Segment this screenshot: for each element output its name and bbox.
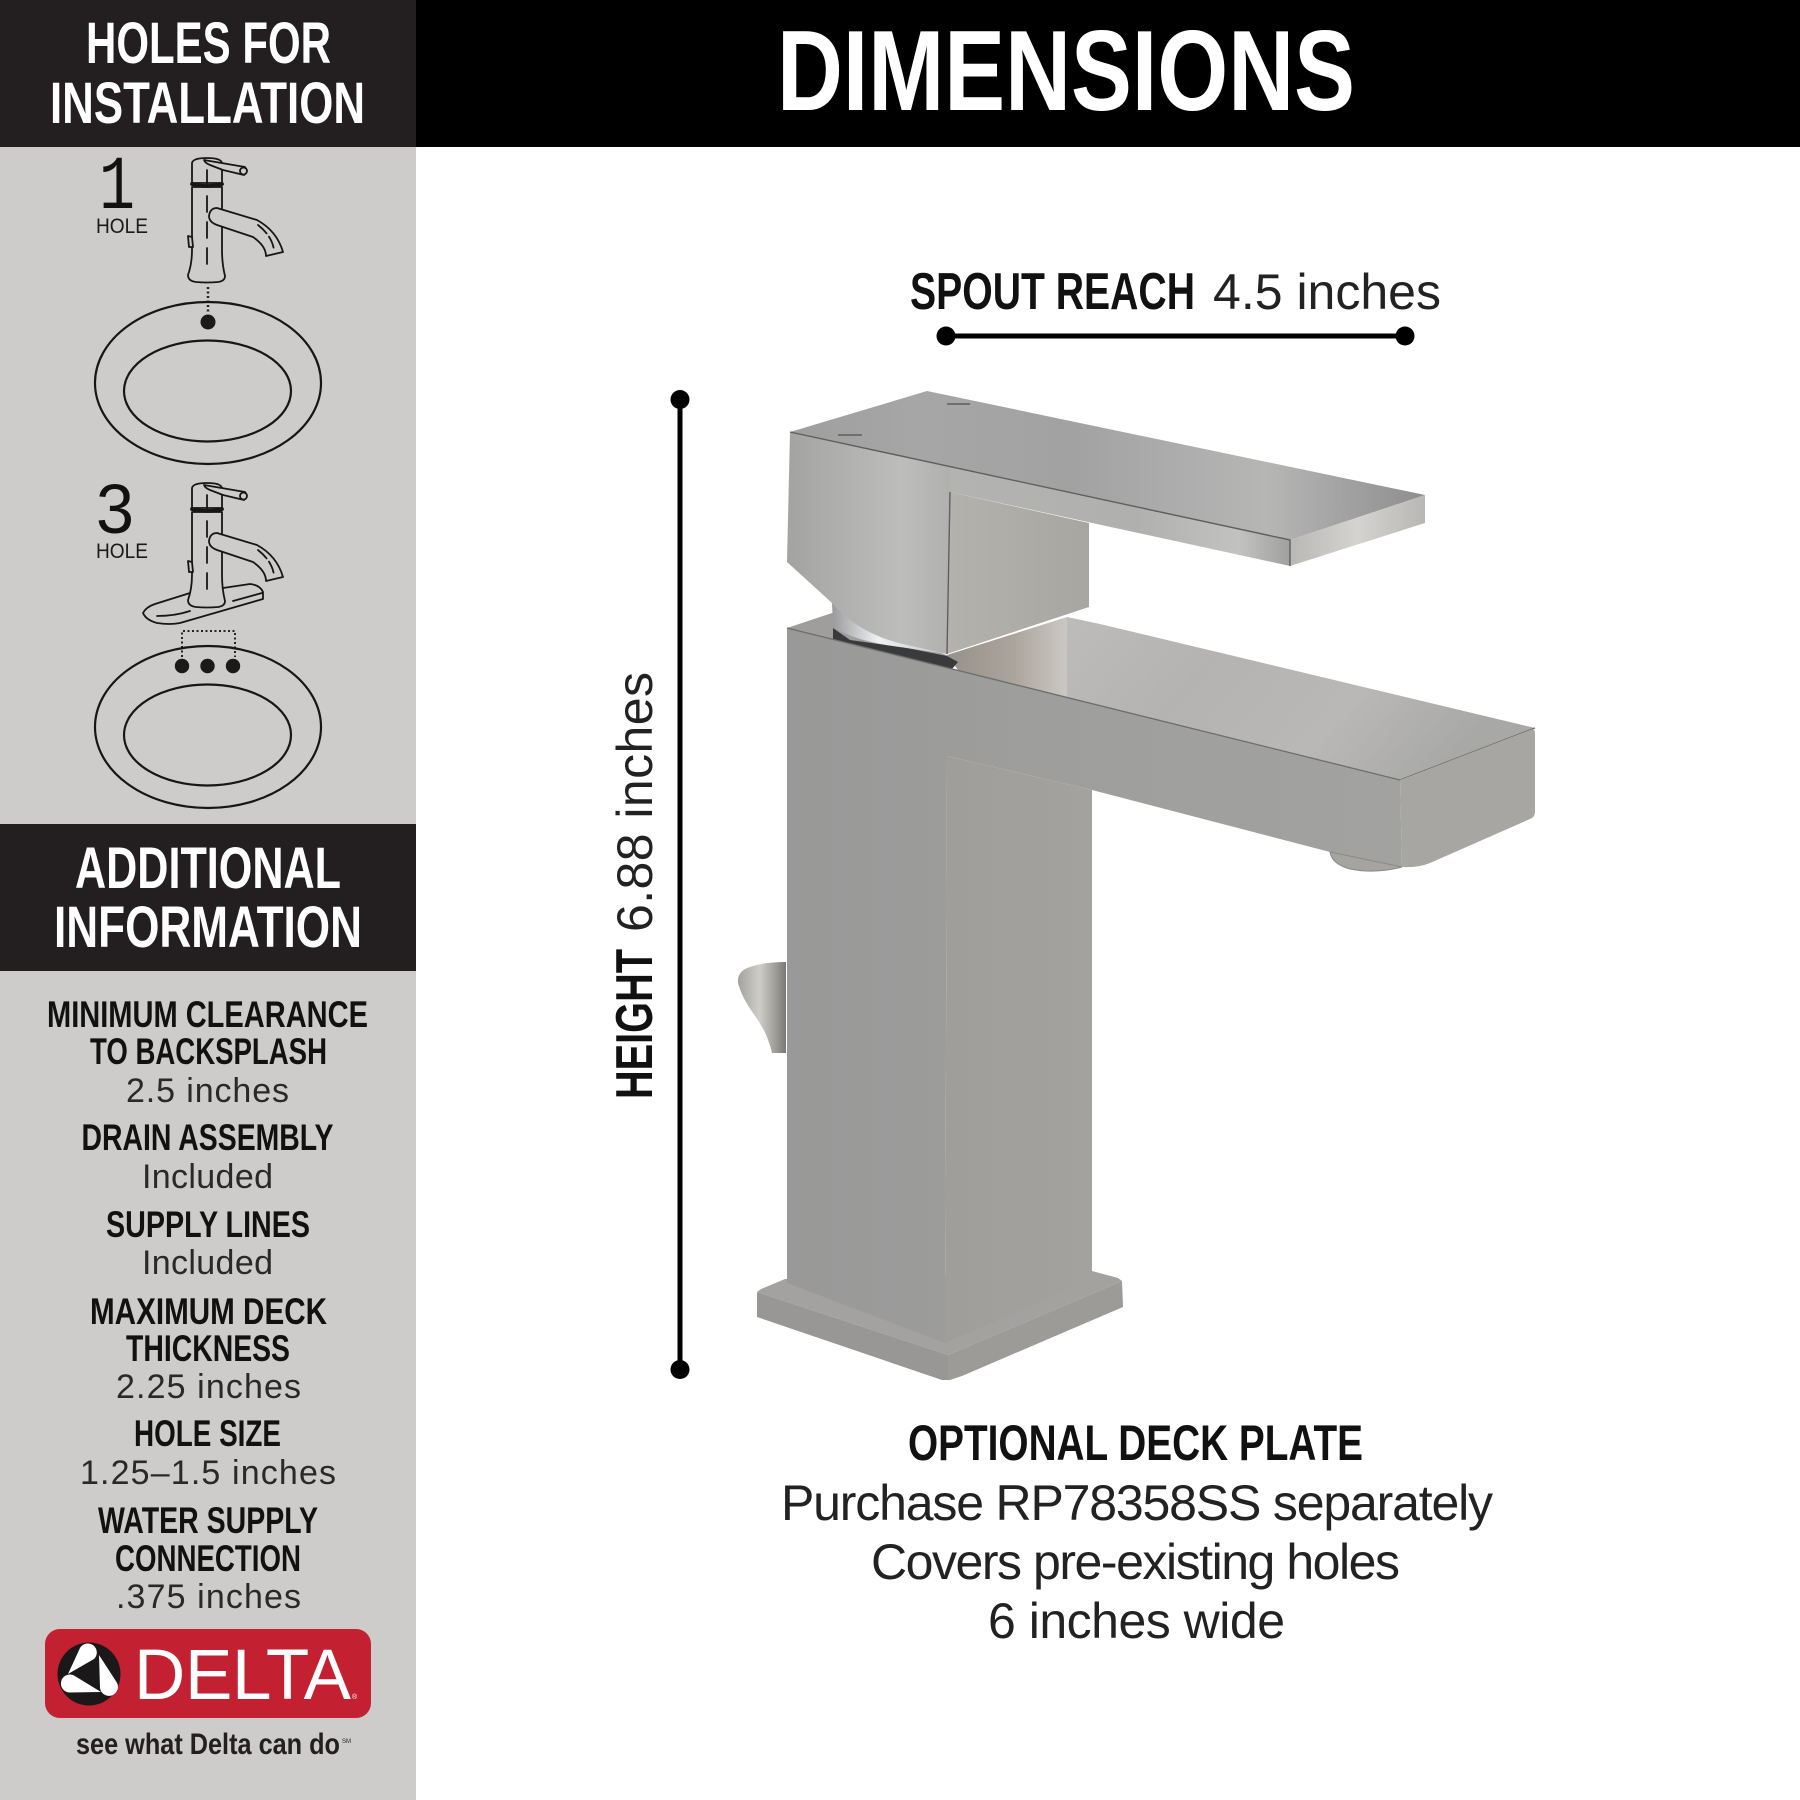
heading: additional information: ADDITIONAL (75, 836, 341, 901)
label: 1 hole: HOLE (96, 214, 148, 238)
label: height: HEIGHT (606, 949, 664, 1099)
title: dimensions: DIMENSIONS (777, 8, 1355, 135)
heading: holes for installation: HOLES FOR (86, 11, 331, 76)
handle block left face (787, 432, 950, 654)
title: dimensions (416, 0, 1800, 147)
text: maximum deck thickness: THICKNESS (126, 1328, 290, 1369)
text: optional deck plate (781, 1415, 1493, 1649)
aerator (1330, 852, 1402, 871)
text: hole size (80, 1413, 336, 1492)
handle block right face (947, 492, 1089, 654)
label: 1 hole: 1 (99, 145, 135, 231)
text: minimum clearance: TO BACKSPLASH (90, 1031, 327, 1072)
icon: three-hole faucet with deck plate (143, 483, 283, 624)
text: optional deck plate: Purchase RP78358SS separately (781, 1475, 1493, 1531)
text: supply lines (106, 1204, 310, 1282)
text: optional deck plate: OPTIONAL DECK PLATE (908, 1415, 1363, 1471)
chrome stem (832, 603, 947, 654)
reflection at spout base (947, 617, 1067, 697)
text: water supply connection: CONNECTION (115, 1538, 301, 1579)
text: minimum clearance: MINIMUM CLEARANCE (47, 994, 368, 1035)
text: water supply connection (98, 1500, 318, 1616)
icon: three-hole sink (95, 631, 321, 808)
logo: delta (45, 1629, 371, 1718)
text: drain assembly: Included (142, 1158, 273, 1196)
text: tagline: SM (342, 1739, 351, 1745)
heading: additional information: INFORMATION (54, 895, 362, 960)
heading: additional information (0, 824, 416, 971)
text: supply lines: SUPPLY LINES (106, 1204, 310, 1245)
panel: left sidebar (0, 0, 416, 1800)
text: optional deck plate: Covers pre-existing holes (871, 1534, 1400, 1590)
text: optional deck plate: 6 inches wide (988, 1593, 1285, 1649)
label: spout reach: 4.5 inches (1213, 264, 1441, 320)
text: minimum clearance (47, 994, 368, 1110)
text: supply lines: Included (142, 1244, 273, 1282)
spout top edge line (787, 628, 1535, 780)
text: maximum deck thickness: 2.25 inches (116, 1368, 301, 1406)
label: 3 hole: 3 (96, 470, 134, 548)
body right face (945, 756, 1092, 1343)
image: faucet (738, 391, 1535, 1380)
spout top surface (1067, 617, 1535, 780)
logo: delta: DELTA (134, 1636, 352, 1715)
label: height: 6.88 inches (607, 672, 663, 932)
text: hole size: HOLE SIZE (134, 1413, 281, 1454)
text: maximum deck thickness (90, 1291, 327, 1406)
body and spout front face (787, 628, 1402, 1343)
text: maximum deck thickness: MAXIMUM DECK (90, 1291, 327, 1332)
text: drain assembly: DRAIN ASSEMBLY (82, 1117, 334, 1158)
label: height (606, 672, 664, 1099)
spout end face (1400, 729, 1535, 867)
label: spout reach: SPOUT REACH (910, 263, 1195, 321)
text: drain assembly (82, 1117, 334, 1196)
arrow: height dimension line (670, 390, 690, 1379)
heading: holes for installation (0, 0, 416, 147)
handle top surface (790, 391, 1425, 540)
base plate (757, 1271, 1123, 1380)
text: water supply connection: .375 inches (116, 1578, 301, 1616)
heading: holes for installation: INSTALLATION (50, 71, 365, 136)
drain lever (738, 962, 786, 1053)
dark shadow beneath handle (833, 628, 958, 669)
icon: single-hole faucet (188, 158, 283, 282)
label: 3 hole (96, 470, 148, 563)
icon: single-hole sink (95, 287, 321, 464)
text: minimum clearance: 2.5 inches (126, 1072, 289, 1110)
text: tagline: see what Delta can do (76, 1728, 340, 1761)
handle end face (1290, 495, 1425, 566)
text: water supply connection: WATER SUPPLY (98, 1500, 318, 1541)
label: 3 hole: HOLE (96, 539, 148, 563)
reflective top of body (787, 613, 960, 668)
logo: delta: ® (352, 1693, 358, 1701)
arrow: spout reach dimension line (936, 326, 1414, 346)
handle edges (790, 432, 1290, 654)
handle front strip (950, 466, 1290, 566)
text: hole size: 1.25–1.5 inches (80, 1454, 336, 1492)
